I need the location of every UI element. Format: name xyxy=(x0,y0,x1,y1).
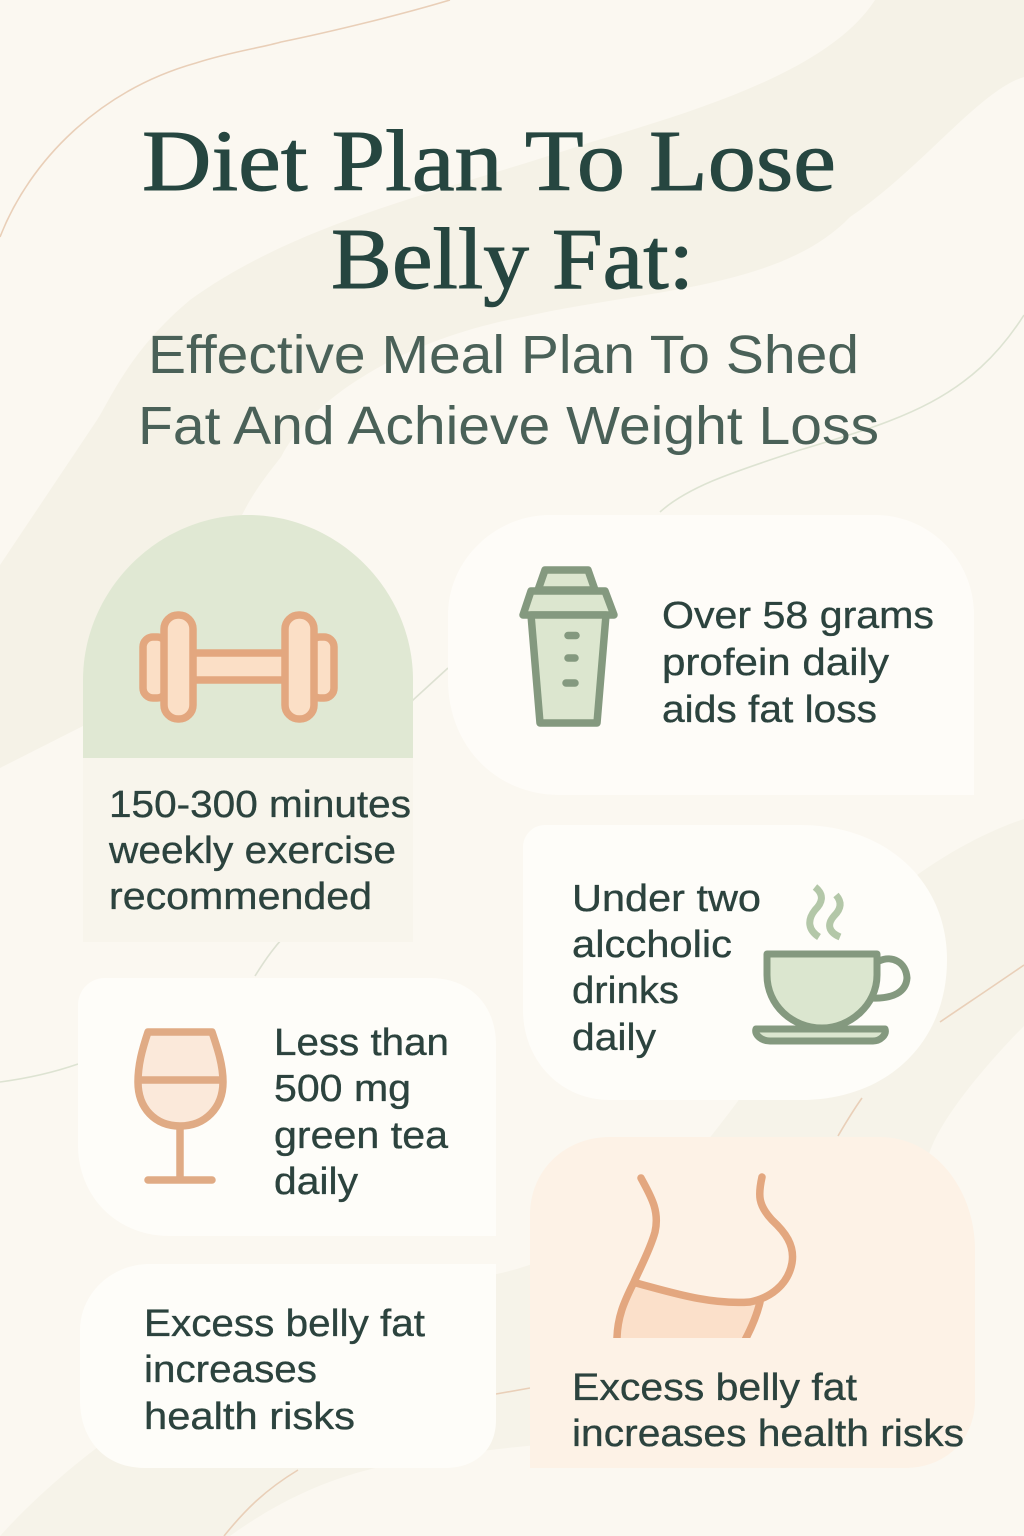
text: alcohol: alccholic xyxy=(572,924,732,966)
text: alcohol: Under two xyxy=(572,878,761,920)
text: green tea: green tea xyxy=(274,1115,449,1157)
text: exercise: recommended xyxy=(109,876,372,918)
text: protein: aids fat loss xyxy=(662,689,877,731)
text: protein xyxy=(662,595,934,731)
text: alcohol: daily xyxy=(572,1017,656,1059)
text: green tea: daily xyxy=(274,1161,358,1203)
panel: protein xyxy=(448,515,974,795)
text: alcohol: drinks xyxy=(572,970,679,1012)
text: exercise xyxy=(108,784,411,918)
icon: dumbbell xyxy=(143,615,334,719)
text: green tea: 500 mg xyxy=(274,1068,411,1110)
panel: green tea xyxy=(78,978,496,1236)
subtitle xyxy=(138,325,879,456)
text: exercise: weekly exercise xyxy=(108,830,396,872)
title: Belly Fat: xyxy=(331,210,694,307)
icon: wine glass xyxy=(138,1032,223,1180)
subtitle: Fat And Achieve Weight Loss xyxy=(138,396,879,456)
text: protein: profein daily xyxy=(662,642,889,684)
text: health risks: Excess belly fat xyxy=(144,1303,425,1345)
text: health risks: health risks xyxy=(144,1396,355,1438)
panel: alcohol xyxy=(523,825,947,1100)
subtitle: Effective Meal Plan To Shed xyxy=(148,325,859,385)
panel: weekly exercise xyxy=(83,515,413,942)
text: health risks xyxy=(144,1303,425,1438)
text: health risks: increases xyxy=(144,1349,317,1391)
panel: belly fat xyxy=(530,1137,975,1468)
title xyxy=(142,112,836,307)
text: belly fat: Excess belly fat xyxy=(572,1367,857,1409)
text: protein: Over 58 grams xyxy=(662,595,934,637)
text: alcohol xyxy=(572,878,761,1059)
text: green tea xyxy=(274,1022,449,1203)
title: Diet Plan To Lose xyxy=(142,112,836,209)
text: belly fat xyxy=(572,1367,964,1455)
text: green tea: Less than xyxy=(274,1022,449,1064)
panel: health risks xyxy=(80,1264,496,1468)
icon: waist xyxy=(617,1177,793,1345)
text: exercise: 150-300 minutes xyxy=(109,784,411,826)
text: belly fat: increases health risks xyxy=(572,1413,964,1455)
icon: protein shaker xyxy=(523,570,614,723)
icon: tea cup xyxy=(756,887,907,1041)
